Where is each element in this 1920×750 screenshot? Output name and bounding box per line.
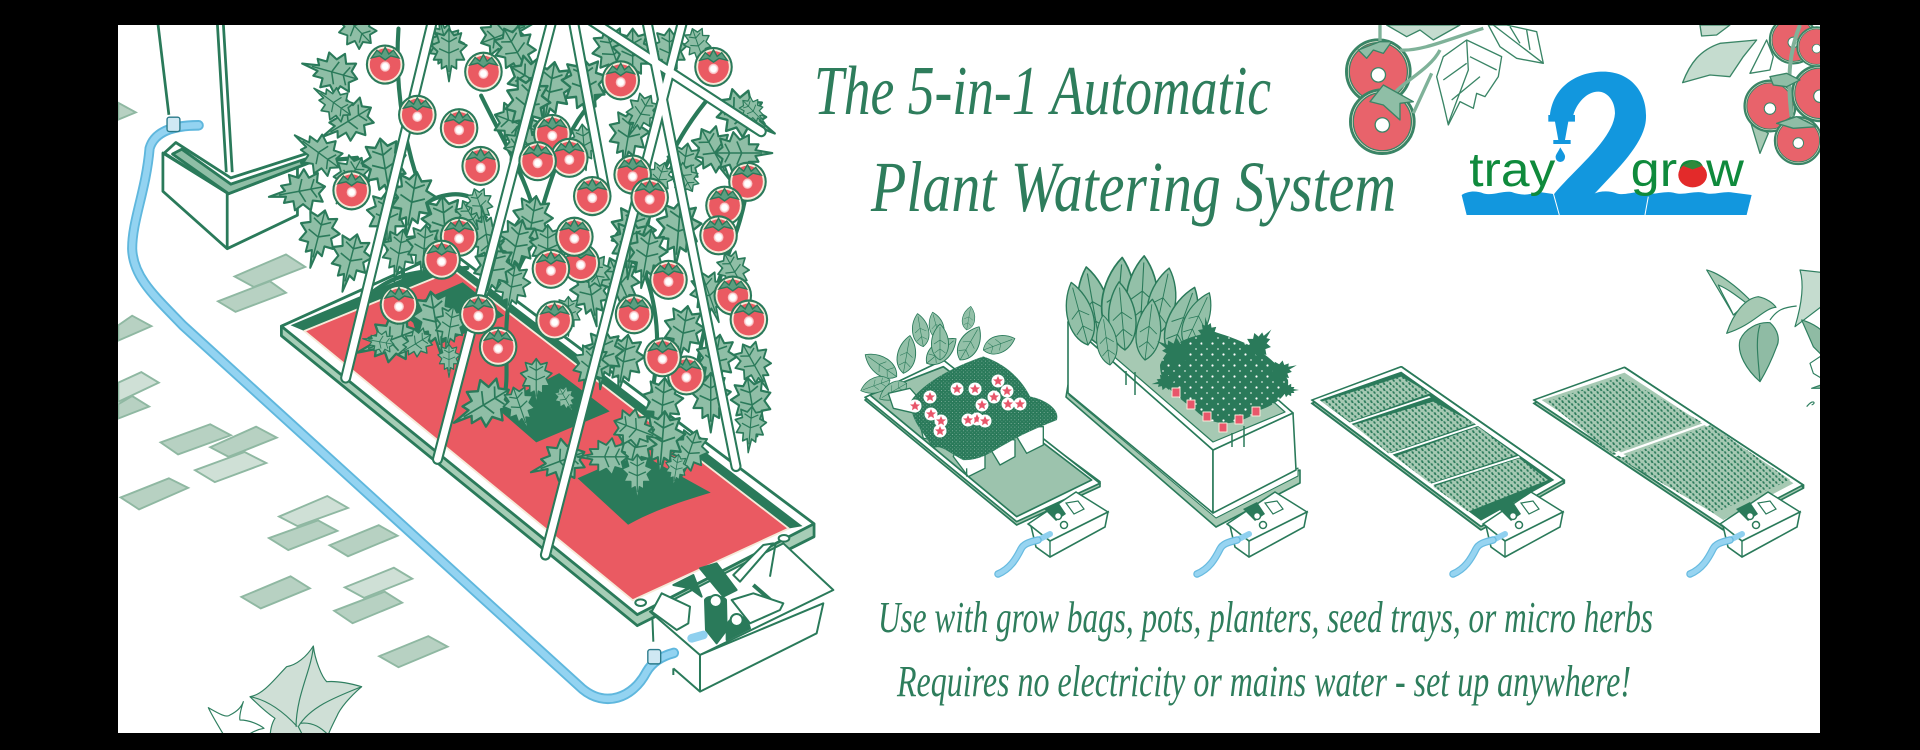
grow wordmark: grow (1631, 143, 1745, 197)
logo: tray2grow (1462, 72, 1752, 215)
unit 3: tray with four seed sections (1312, 367, 1564, 530)
unit 4: reservoir and hose (1690, 492, 1800, 574)
unit 3: reservoir and hose (1453, 492, 1563, 574)
illustration: wall corner (157, 19, 316, 249)
decoration: leaves right edge (1707, 270, 1830, 407)
unit 1: reservoir and hose (998, 492, 1108, 574)
unit 4: tray with two seed sections (1534, 367, 1803, 530)
illustration: reservoir box (635, 535, 833, 692)
cherry tomatoes (332, 44, 768, 396)
illustration: tomato plants on cane trellis (265, 0, 786, 555)
unit 1: tray with pots (858, 305, 1100, 525)
illustration: main tray with red growing mat (281, 250, 814, 626)
illustration: paving stones (118, 103, 448, 667)
illustration: ivy leaves (208, 646, 362, 740)
logo tomato (1678, 163, 1707, 187)
title: Plant Watering System (870, 147, 1396, 227)
right vine with tomatoes (1683, 16, 1848, 165)
numeral 2 shaped as a tap (1550, 72, 1646, 195)
unit 2: planter with spinach and peppers (1059, 255, 1300, 527)
tomato leaves (265, 0, 786, 501)
left vine with tomatoes (1346, 25, 1543, 154)
caption: requirements: Requires no electricity or mains water - set up anywhere! (896, 657, 1631, 706)
title (814, 53, 1396, 227)
tray wordmark: tray (1469, 143, 1556, 197)
unit 2: reservoir and hose (1197, 492, 1307, 574)
water tray (1462, 191, 1752, 215)
illustration: water hose (132, 117, 674, 699)
title: The 5-in-1 Automatic (814, 53, 1271, 130)
plant stems (302, 29, 747, 459)
trellis canes (346, 19, 761, 555)
decoration: tomato vines top right (1346, 16, 1848, 165)
